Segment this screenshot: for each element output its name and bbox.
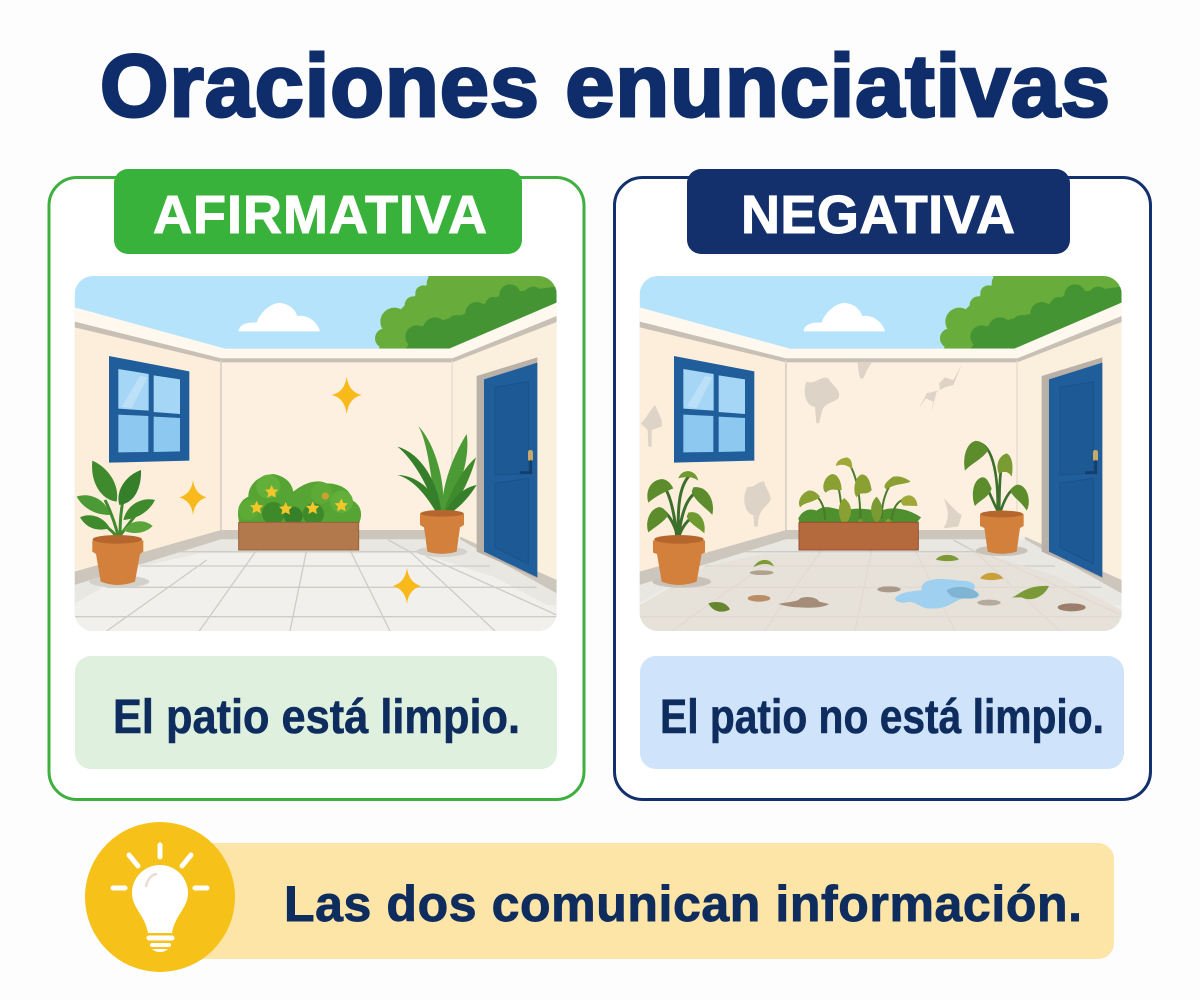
header badge: afirmativa: AFIRMATIVA: [153, 185, 487, 245]
card outline: negativa: [614, 178, 1150, 800]
floor tint: [640, 553, 1122, 631]
panel: afirmativa: [49, 169, 584, 800]
panel: negativa: [614, 169, 1150, 800]
illustration: dirty patio: [640, 273, 1125, 631]
plant: wilted left: [647, 471, 713, 588]
callout text: Las dos comunican información.: [284, 876, 1082, 932]
header badge: afirmativa: [114, 169, 522, 254]
plant: left pot: [77, 461, 155, 588]
callout: conclusion: [85, 822, 1114, 972]
planter with flowers: [238, 474, 361, 550]
caption: afirmativa: El patio está limpio.: [113, 691, 520, 744]
card outline: afirmativa: [49, 178, 584, 800]
plant: wilted right: [964, 441, 1029, 556]
floor debris: leaves, dirt and puddle: [708, 555, 1086, 612]
caption: negativa: El patio no está limpio.: [660, 691, 1104, 744]
header badge: negativa: [687, 169, 1070, 254]
title: Oraciones enunciativas: [100, 36, 1110, 135]
callout bar: [180, 843, 1114, 959]
wall stains: [641, 363, 962, 528]
sparkles: [179, 377, 421, 604]
header badge: negativa: NEGATIVA: [741, 185, 1015, 245]
plant: right pot: [397, 426, 477, 557]
caption: negativa: [640, 656, 1124, 769]
caption: afirmativa: [75, 656, 557, 769]
illustration: clean patio: [75, 273, 560, 631]
planter: wilted: [798, 457, 921, 550]
icon: light bulb: [85, 822, 235, 972]
